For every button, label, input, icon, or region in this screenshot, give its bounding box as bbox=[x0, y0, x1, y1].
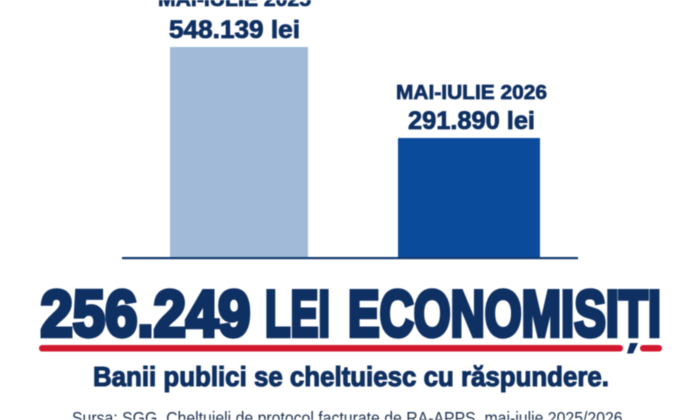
bar: mai-iulie 2025 bbox=[170, 47, 308, 257]
headline bbox=[40, 277, 661, 350]
headline: 256.249 bbox=[40, 277, 250, 350]
comma of letter Ț bbox=[627, 343, 638, 354]
subheading: Banii publici se cheltuiesc cu răspundere. bbox=[93, 361, 609, 392]
bar: mai-iulie 2026 bbox=[398, 138, 540, 257]
red underline bbox=[39, 343, 662, 354]
bar chart bbox=[122, 0, 578, 259]
headline: LEI bbox=[265, 277, 330, 350]
label: mai-iulie 2026: MAI-IULIE 2026 bbox=[396, 82, 547, 104]
value: 548.139 lei: 548.139 lei bbox=[169, 16, 300, 44]
value: 291.890 lei: 291.890 lei bbox=[408, 107, 535, 135]
chart baseline bbox=[122, 257, 578, 259]
